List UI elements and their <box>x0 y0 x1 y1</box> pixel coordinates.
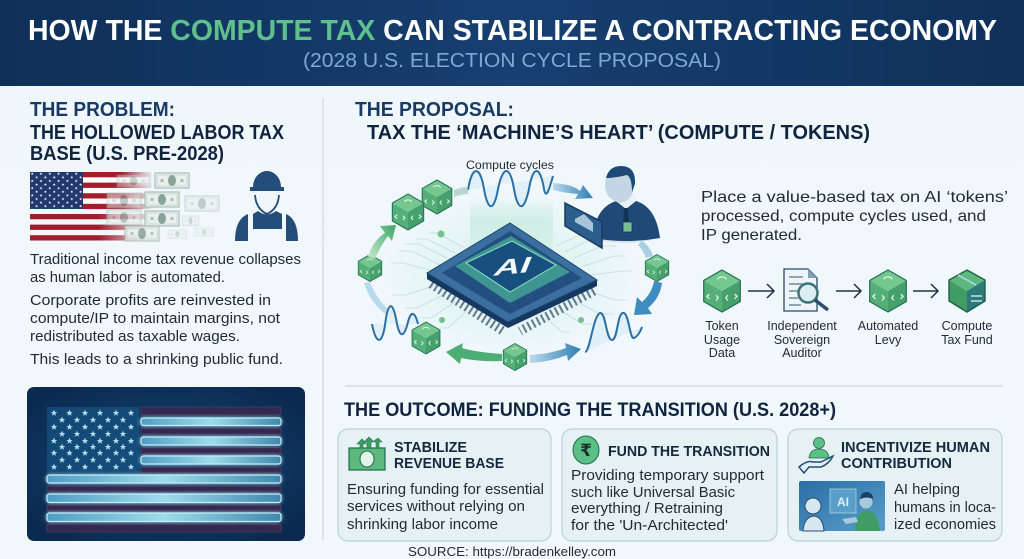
icon: levy cube <box>870 270 906 312</box>
image: AI with human <box>799 481 885 531</box>
icon: tax fund box <box>949 270 985 312</box>
icon: fading US flag <box>30 172 155 240</box>
panel: the proposal <box>355 99 1008 370</box>
icon: dollar bills dissolving <box>107 173 219 241</box>
panel: the problem <box>27 99 305 541</box>
flow labels: Independent <box>767 319 837 333</box>
problem text: Traditional income tax revenue collapses <box>30 251 301 268</box>
pins <box>431 284 594 331</box>
arrow: bottom green <box>446 343 502 364</box>
problem text: This leads to a shrinking public fund. <box>30 351 283 368</box>
arrow 3 <box>913 284 938 298</box>
arrow: lower left blue <box>364 282 389 314</box>
cubes around cycle <box>358 180 669 370</box>
card heading: STABILIZE <box>394 440 467 456</box>
problem heading: THE HOLLOWED LABOR TAX <box>30 122 285 144</box>
card body: humans in loca- <box>894 500 996 516</box>
outcome heading: THE OUTCOME: FUNDING THE TRANSITION (U.S. 2028+) <box>344 400 836 421</box>
card: fund the transition <box>562 429 777 541</box>
problem heading <box>30 99 285 165</box>
arrow: top right <box>553 183 593 199</box>
card: stabilize revenue base <box>338 429 551 541</box>
chip glow <box>380 195 640 355</box>
proposal description: IP generated. <box>701 227 802 244</box>
proposal description: Place a value-based tax on AI ‘tokens’ <box>701 189 1008 206</box>
card body: for the 'Un-Architected' <box>571 518 728 534</box>
panel: the outcome <box>338 400 1002 541</box>
flow labels: Auditor <box>782 346 822 360</box>
arrow: upper left green <box>368 225 396 259</box>
circuit traces <box>391 233 632 332</box>
proposal description <box>701 189 1008 244</box>
card body <box>571 468 764 534</box>
icon: auditor document <box>784 269 828 311</box>
card: incentivize human contribution: CONTRIBUTION <box>841 456 952 472</box>
card body: ized economies <box>894 517 996 533</box>
image: AI with human: AI <box>837 495 849 509</box>
flow labels: Token <box>705 319 739 333</box>
neon US flag panel <box>27 387 305 541</box>
card body: Providing temporary support <box>571 468 764 484</box>
card body: such like Universal Basic <box>571 485 735 501</box>
card body: everything / Retraining <box>571 501 723 517</box>
flow labels: Sovereign <box>774 333 830 347</box>
arrow: upper right fading blue <box>638 241 653 258</box>
icon: auditor person <box>593 166 660 243</box>
arrow: lower right blue <box>634 281 662 315</box>
chip body <box>427 273 597 328</box>
icon: token cube <box>704 270 740 312</box>
arrow 2 <box>836 284 861 298</box>
card body: Ensuring funding for essential <box>347 482 544 498</box>
card heading: FUND THE TRANSITION <box>608 444 770 460</box>
arrow 1 <box>748 284 774 298</box>
subtitle: (2028 U.S. ELECTION CYCLE PROPOSAL) <box>303 50 721 72</box>
icon: person in hand <box>799 438 833 473</box>
chip AI label: AI <box>490 251 536 281</box>
AI chip compute cycle diagram <box>358 160 669 370</box>
problem text: as human labor is automated. <box>30 269 225 286</box>
proposal heading: THE PROPOSAL: <box>355 99 514 121</box>
compute cycles label: Compute cycles <box>466 160 554 172</box>
icon: construction worker <box>235 171 298 241</box>
flow labels: Usage <box>704 333 740 347</box>
card body: AI helping <box>894 482 960 498</box>
flow labels: Levy <box>875 333 902 347</box>
card: incentivize human contribution <box>788 429 1002 541</box>
flow labels <box>704 319 993 360</box>
problem text: redistributed as taxable wages. <box>30 328 240 345</box>
card body: services without relying on <box>347 499 525 515</box>
proposal heading: TAX THE ‘MACHINE’S HEART’ (COMPUTE / TOKENS) <box>367 122 870 144</box>
flow labels: Data <box>709 346 735 360</box>
flow labels: Tax Fund <box>941 333 993 347</box>
icon: money with arrows <box>349 437 385 470</box>
icon: rupee coin: ₹ <box>580 441 592 461</box>
card body <box>894 482 996 533</box>
card body: shrinking labor income <box>347 517 498 533</box>
flow labels: Automated <box>858 319 918 333</box>
title: HOW THE COMPUTE TAX CAN STABILIZE A CONTRACTING ECONOMY <box>28 15 997 47</box>
wave: lower right <box>585 313 642 352</box>
proposal heading <box>355 99 870 144</box>
card: stabilize revenue base: REVENUE BASE <box>394 456 504 472</box>
proposal description: processed, compute cycles used, and <box>701 208 986 225</box>
icon: auditor monitor <box>565 203 602 248</box>
problem heading: THE PROBLEM: <box>30 99 175 121</box>
problem text: Corporate profits are reinvested in <box>30 292 271 309</box>
problem text: compute/IP to maintain margins, not <box>30 310 281 327</box>
icon: rupee coin <box>573 436 599 464</box>
problem text <box>30 251 301 368</box>
flow labels: Compute <box>942 319 992 333</box>
wave: top <box>468 171 553 206</box>
card heading: INCENTIVIZE HUMAN <box>841 440 990 456</box>
source line: SOURCE: https://bradenkelley.com <box>408 544 616 559</box>
problem heading: BASE (U.S. PRE-2028) <box>30 143 224 165</box>
wave: lower left <box>372 306 418 340</box>
header banner <box>0 0 1024 86</box>
process flow <box>704 269 993 360</box>
arrow: bottom blue <box>530 343 581 363</box>
card body <box>347 482 544 533</box>
